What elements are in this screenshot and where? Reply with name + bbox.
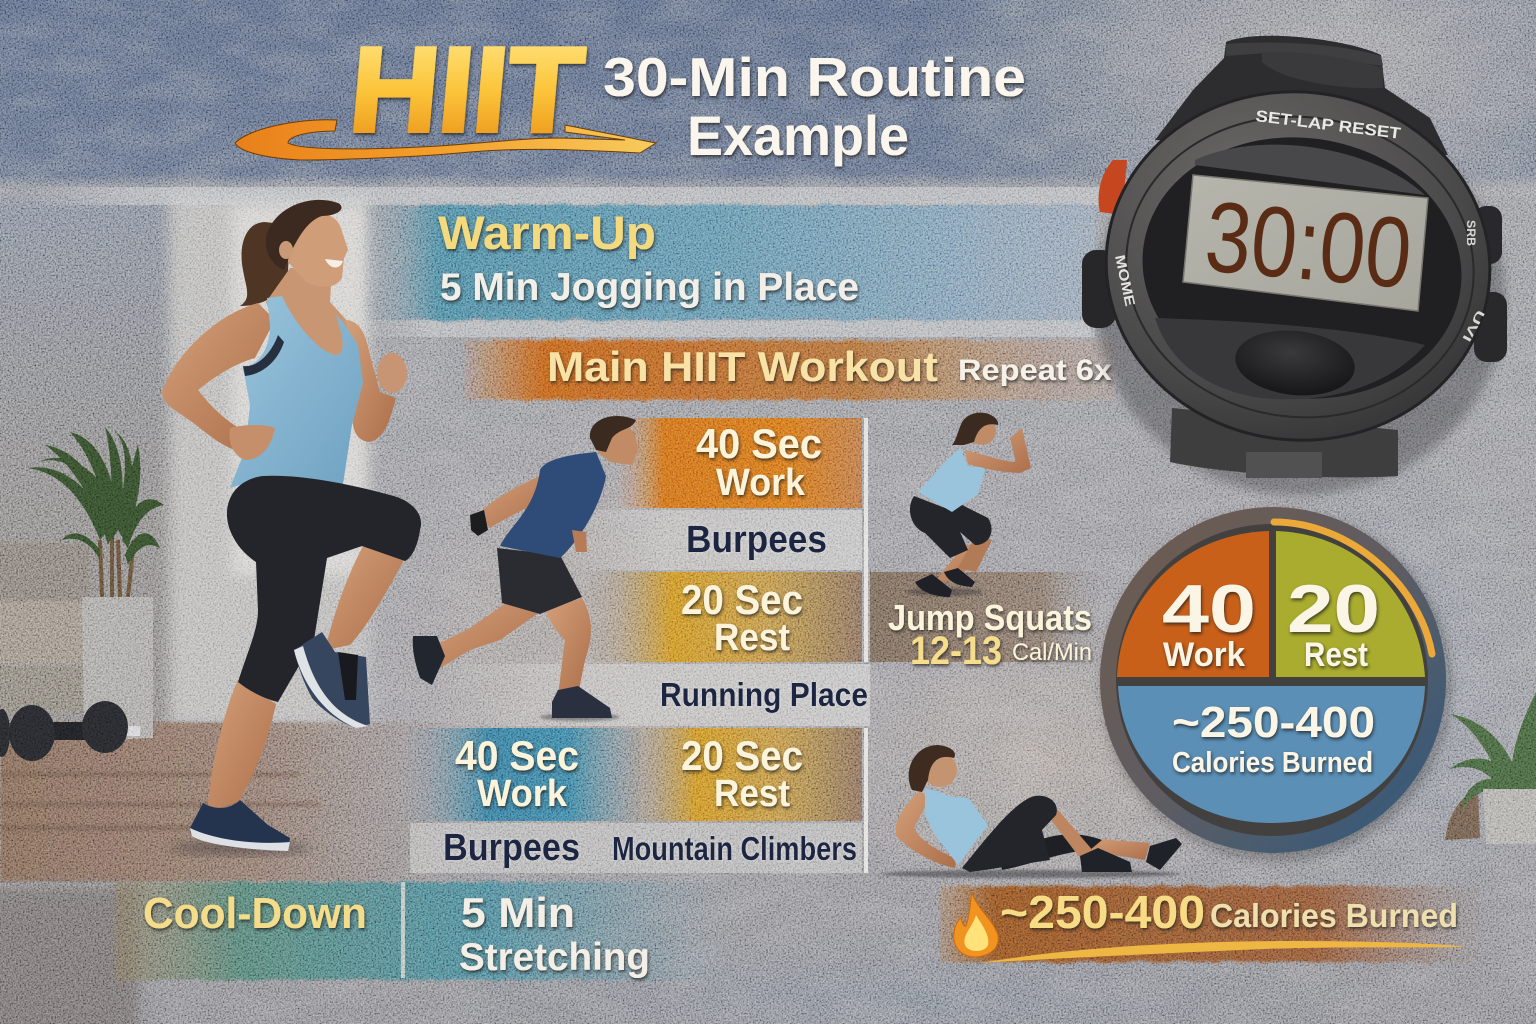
screen surround	[1125, 117, 1479, 419]
shins	[936, 545, 982, 582]
mountain climbers: Mountain Climbers	[612, 830, 857, 867]
smile	[325, 259, 343, 268]
20 sec rest, lower: 20 Sec	[681, 732, 803, 779]
label: right lower: UVI	[1459, 308, 1488, 344]
cool-down heading: Cool-Down	[143, 889, 367, 938]
blue calories segment	[1118, 686, 1425, 823]
40 sec work, orange: 40 Sec	[696, 420, 822, 467]
tank	[918, 448, 985, 512]
lug grip	[1246, 452, 1322, 478]
front leg	[545, 598, 591, 695]
head	[598, 422, 638, 465]
capris	[910, 496, 992, 558]
calories range: ~250-400	[1000, 886, 1205, 938]
orange work segment	[1117, 531, 1269, 677]
ground shadow	[170, 841, 310, 855]
arm	[965, 428, 1031, 473]
workout cell labels: Rest	[714, 773, 790, 815]
panel: workout cells	[405, 418, 1100, 873]
warm-up detail: 5 Min Jogging in Place	[440, 266, 859, 309]
person: woman doing jump squats	[907, 413, 1031, 597]
standing calf	[208, 680, 276, 812]
left button	[1082, 250, 1116, 328]
shorts	[497, 548, 582, 614]
back arm	[478, 476, 550, 528]
label: right upper: SRB	[1464, 220, 1478, 246]
propping arm	[896, 790, 955, 868]
exercise labels	[443, 519, 868, 869]
leggings, lower leg	[1000, 834, 1102, 870]
chart: work and rest dial	[1100, 507, 1446, 853]
front shoe	[552, 686, 612, 718]
calorie value: ~250-400	[1172, 698, 1375, 747]
leggings	[962, 796, 1057, 872]
panel: warm-up band	[30, 187, 1100, 337]
shoes	[915, 574, 952, 597]
warm-up heading: Warm-Up	[438, 206, 656, 259]
bottom lug	[1170, 408, 1398, 477]
red button	[1099, 160, 1127, 215]
gold progress arc	[1274, 522, 1432, 654]
sports bra edge	[243, 335, 284, 376]
shin, straight leg	[1085, 838, 1150, 860]
label: mode: MOME	[1112, 253, 1139, 307]
room: floor	[0, 722, 470, 1024]
head	[968, 417, 996, 445]
rear arm	[162, 303, 275, 450]
top strap	[1155, 36, 1448, 155]
shoes	[1080, 848, 1132, 872]
cool-down activity: Stretching	[459, 936, 650, 979]
person: woman reclining	[880, 745, 1182, 878]
panel: cool-down band	[115, 882, 735, 980]
hand on hip	[230, 425, 275, 460]
dial ring	[1100, 507, 1446, 853]
ear	[279, 241, 293, 259]
work value: 40	[1162, 571, 1256, 647]
20 sec rest, upper: 20 Sec	[681, 576, 803, 623]
rear leg	[436, 600, 540, 668]
dumbbell	[0, 701, 140, 761]
upper screen facet	[1195, 145, 1425, 195]
lower screen panel	[1155, 318, 1425, 399]
front fist	[377, 353, 407, 393]
title line one: 30-Min Routine	[603, 46, 1026, 108]
shadow	[1095, 105, 1505, 495]
shirt	[500, 452, 606, 558]
workout cell labels: Cal/Min	[1012, 639, 1092, 666]
work label: Work	[1163, 636, 1245, 674]
dial labels	[1162, 571, 1380, 779]
bezel	[1089, 73, 1507, 459]
neck and chest	[266, 268, 350, 358]
label: set lap reset: SET-LAP RESET	[1255, 108, 1402, 143]
shin, bent leg	[1042, 808, 1095, 858]
plant in pot	[28, 427, 164, 740]
pill button	[1232, 325, 1358, 401]
HIIT wordmark: HIIT	[345, 23, 588, 157]
burpees, lower: Burpees	[443, 827, 580, 869]
bezel inner ring	[1109, 97, 1491, 437]
dial dark core	[1116, 524, 1428, 836]
green rest segment	[1276, 531, 1425, 677]
glove	[470, 510, 488, 536]
workout cell labels: Work	[716, 462, 806, 504]
main workout heading	[547, 343, 1112, 390]
head	[923, 753, 957, 787]
main workout heading: Repeat 6x	[958, 354, 1112, 387]
burpees, upper: Burpees	[686, 519, 827, 561]
raised shoe	[294, 632, 370, 728]
calorie label: Calories Burned	[1172, 747, 1373, 779]
LCD	[1183, 175, 1428, 311]
calories banner content	[954, 886, 1467, 963]
person: man running	[413, 416, 638, 721]
ponytail	[240, 222, 290, 306]
plant, right	[1445, 692, 1536, 844]
cool-down text	[143, 889, 650, 979]
raised calf	[325, 546, 404, 650]
rest value: 20	[1287, 571, 1380, 647]
black capris	[227, 476, 421, 702]
title	[235, 23, 1026, 167]
tank top	[230, 296, 363, 488]
right upper button	[1474, 206, 1502, 264]
40 sec work, blue: 40 Sec	[455, 732, 579, 779]
front arm	[345, 320, 396, 442]
hair	[266, 200, 342, 270]
title line two: Example	[687, 104, 909, 167]
underline swoosh	[980, 941, 1467, 963]
calorie rate: 12-13	[910, 629, 1002, 673]
front hand	[572, 530, 587, 552]
workout cell labels	[455, 420, 1092, 815]
rear shoe	[413, 636, 445, 685]
right lower button	[1474, 292, 1507, 362]
jump squats label: Jump Squats	[888, 597, 1092, 638]
panel: main HIIT band	[465, 340, 1115, 400]
panel: calories banner	[940, 886, 1480, 962]
running place: Running Place	[660, 676, 868, 713]
warm-up text	[438, 206, 859, 309]
icon: HIIT swoosh	[235, 120, 656, 160]
main workout heading: Main HIIT Workout	[547, 343, 938, 390]
stopwatch	[1082, 36, 1507, 495]
calories label: Calories Burned	[1210, 897, 1458, 934]
cool-down duration: 5 Min	[461, 889, 575, 936]
person: main woman jogging	[162, 200, 421, 855]
sofa	[0, 543, 90, 711]
icon: flame	[954, 892, 998, 957]
LCD readout: 30:00	[1201, 181, 1416, 310]
standing shoe	[190, 800, 290, 850]
workout cell labels: Work	[477, 773, 568, 815]
tank	[925, 788, 988, 865]
rest label: Rest	[1304, 636, 1368, 674]
face	[285, 213, 348, 287]
workout cell labels: Rest	[714, 617, 790, 659]
room: wall, window, curtains	[0, 195, 370, 730]
